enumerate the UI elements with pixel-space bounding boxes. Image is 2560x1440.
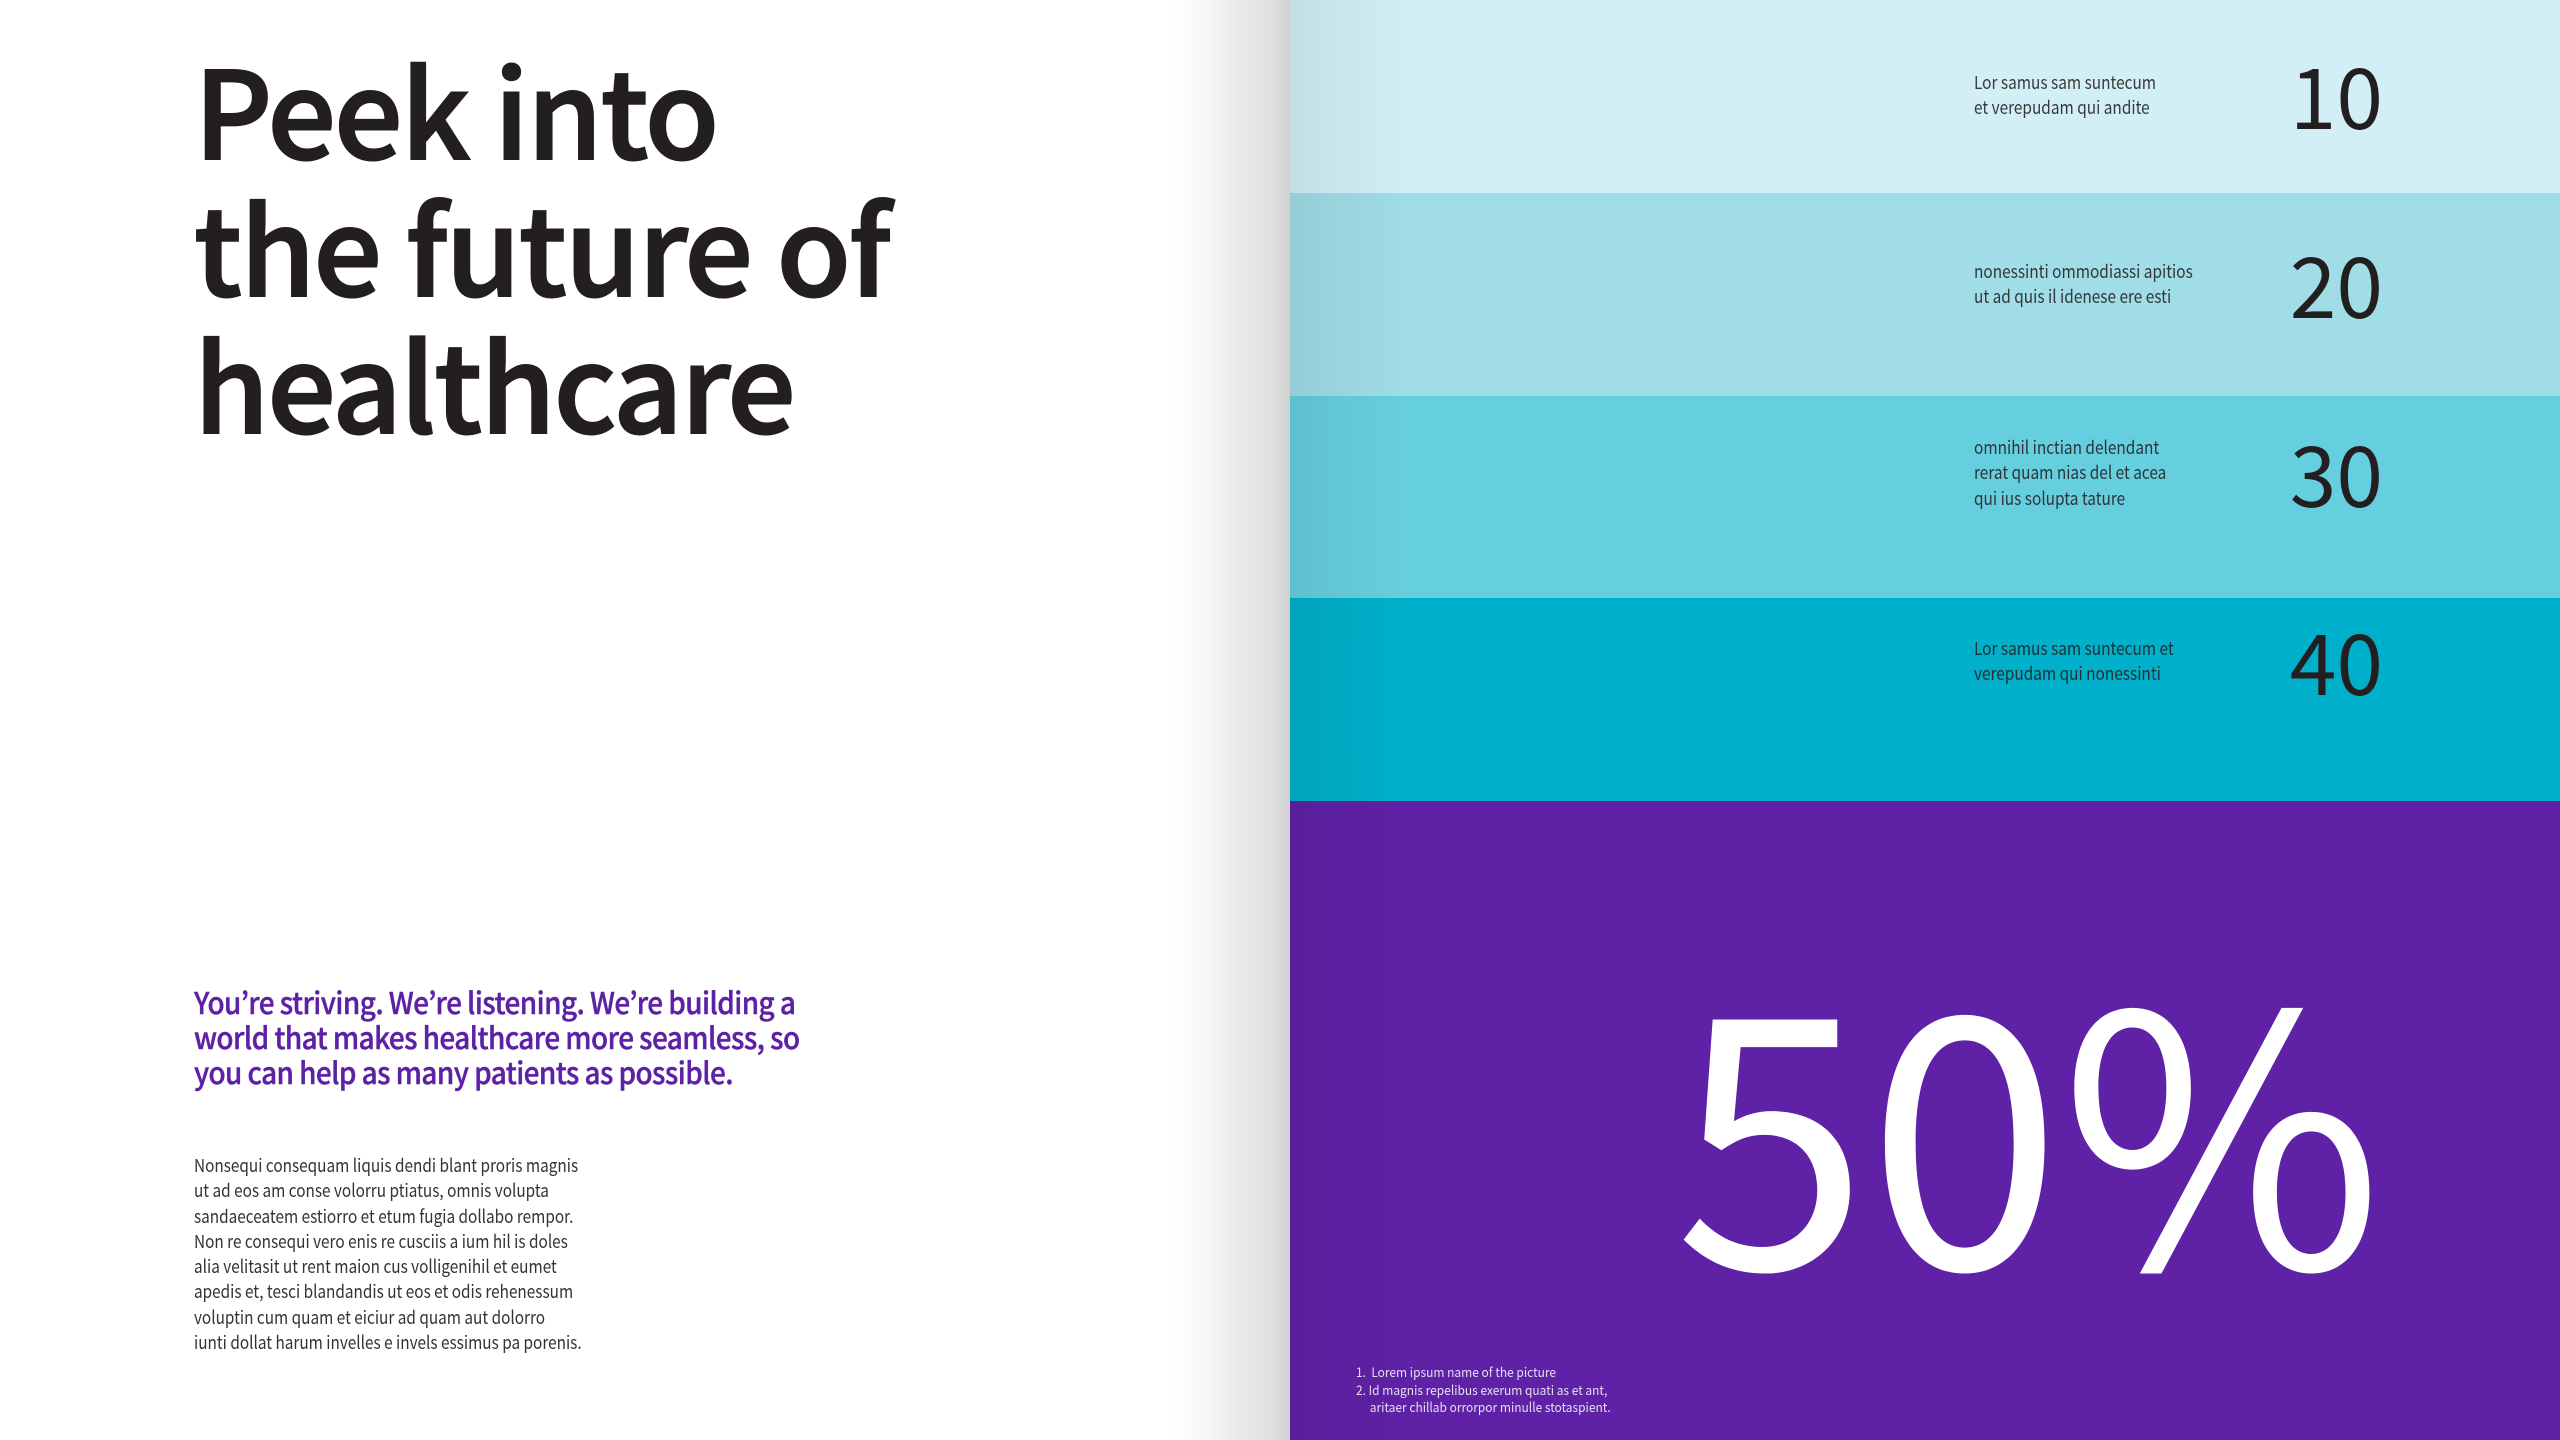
body paragraph: iunti dollat harum invelles e invels essimus pa porenis. <box>194 1329 582 1355</box>
row 30 text: rerat quam nias del et acea <box>1974 459 2166 485</box>
row 30 number: 30 <box>2290 411 2383 532</box>
panel: band 40 <box>1290 598 2560 801</box>
row 10 text: Lor samus sam suntecum <box>1974 69 2156 95</box>
big statistic 50%: 50% <box>1674 863 2382 1370</box>
row 20 number: 20 <box>2290 222 2383 343</box>
footnotes: 1. Lorem ipsum name of the picture <box>1356 1362 1556 1381</box>
row 40 number: 40 <box>2290 599 2383 720</box>
subheading: purple statement: You’re striving. We’re listening. We’re building a <box>194 979 795 1023</box>
panel: band 30 <box>1290 396 2560 598</box>
subheading: purple statement <box>194 979 800 1093</box>
panel: band 20 <box>1290 193 2560 396</box>
title: the future of <box>194 156 889 331</box>
subheading: purple statement: you can help as many patients as possible. <box>194 1049 733 1093</box>
body paragraph: Nonsequi consequam liquis dendi blant proris magnis <box>194 1152 578 1178</box>
title <box>194 19 896 468</box>
row 30 text: qui ius solupta tature <box>1974 485 2125 511</box>
body paragraph: voluptin cum quam et eiciur ad quam aut dolorro <box>194 1304 545 1330</box>
row 40 text: verepudam qui nonessinti <box>1974 660 2161 686</box>
row 30 text <box>1974 434 2166 511</box>
panel: band 10 <box>1290 0 2560 193</box>
page shadow: spine gradient on left page <box>1170 0 1290 1440</box>
row 30 text: omnihil inctian delendant <box>1974 434 2159 460</box>
row 20 text <box>1974 258 2193 309</box>
row 40 text <box>1974 635 2174 686</box>
row 40 text: Lor samus sam suntecum et <box>1974 635 2174 661</box>
title: Peek into <box>194 19 717 194</box>
page shadow: inner gradient on right page <box>1290 0 1415 1440</box>
subheading: purple statement: world that makes healthcare more seamless, so <box>194 1014 800 1058</box>
body paragraph <box>194 1152 582 1355</box>
body paragraph: ut ad eos am conse volorru ptiatus, omnis volupta <box>194 1177 549 1203</box>
row 20 text: nonessinti ommodiassi apitios <box>1974 258 2193 284</box>
title: healthcare <box>194 293 794 468</box>
row 10 text <box>1974 69 2156 120</box>
panel: purple stat <box>1290 801 2560 1440</box>
row 10 number: 10 <box>2290 33 2383 154</box>
footnotes: aritaer chillab orrorpor minulle stotaspient. <box>1370 1397 1611 1416</box>
footnotes <box>1356 1362 1611 1416</box>
body paragraph: Non re consequi vero enis re cusciis a ium hil is doles <box>194 1228 568 1254</box>
row 10 text: et verepudam qui andite <box>1974 94 2150 120</box>
footnotes: 2. Id magnis repelibus exerum quati as et ant, <box>1356 1380 1607 1398</box>
body paragraph: sandaeceatem estiorro et etum fugia dollabo rempor. <box>194 1203 573 1229</box>
body paragraph: alia velitasit ut rent maion cus volligenihil et eumet <box>194 1253 557 1279</box>
row 20 text: ut ad quis il idenese ere esti <box>1974 283 2171 309</box>
body paragraph: apedis et, tesci blandandis ut eos et odis rehenessum <box>194 1278 573 1304</box>
